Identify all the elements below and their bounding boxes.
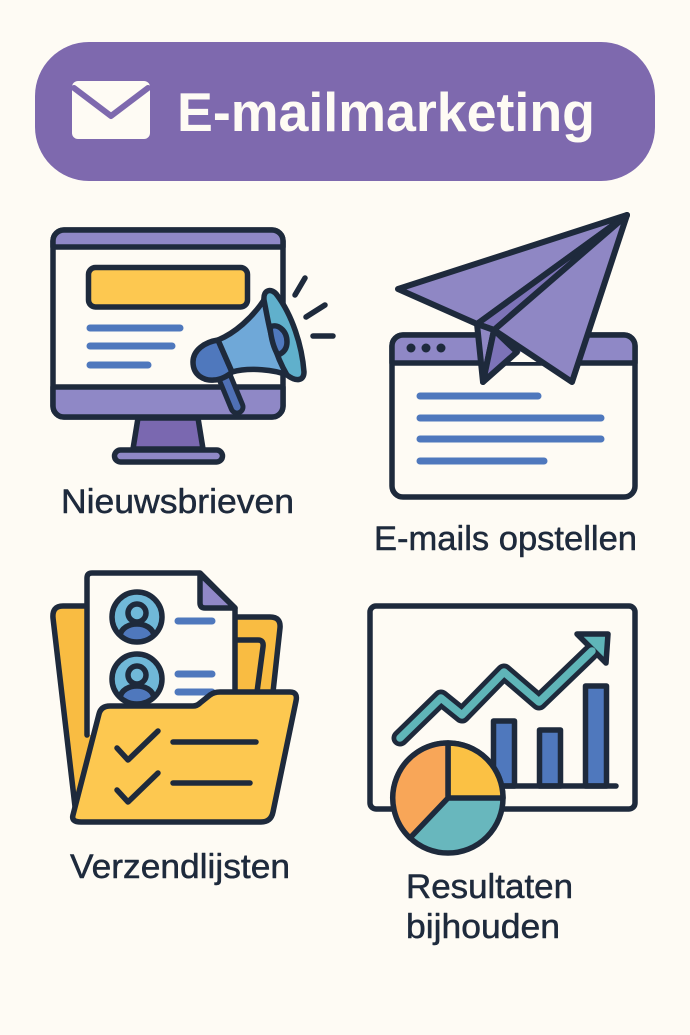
title banner	[35, 42, 655, 181]
icon: monitor	[53, 230, 283, 462]
label: Verzendlijsten: Verzendlijsten	[70, 848, 290, 886]
icon: chart frame	[370, 606, 635, 809]
panel: mailing lists	[53, 573, 296, 822]
icon: bar chart	[470, 686, 616, 786]
icon: trend arrow	[400, 634, 608, 738]
label: Resultaten bijhouden: bijhouden	[406, 908, 560, 946]
panel: composing e-mails	[392, 215, 635, 497]
label: Nieuwsbrieven: Nieuwsbrieven	[61, 483, 294, 521]
panel: newsletters	[53, 230, 333, 462]
icon: paper plane	[398, 215, 627, 382]
icon: pie chart	[393, 743, 503, 853]
title: E-mailmarketing	[177, 81, 595, 143]
label: E-mails opstellen: E-mails opstellen	[374, 520, 637, 558]
icon: envelope	[72, 81, 150, 139]
panel: tracking results	[370, 606, 635, 853]
label: Resultaten bijhouden: Resultaten	[406, 868, 573, 906]
icon: contact sheet	[87, 573, 235, 735]
icon: megaphone	[193, 278, 333, 407]
icon: folder front	[73, 692, 296, 822]
icon: folder back	[53, 606, 280, 815]
icon: browser window	[392, 335, 635, 497]
label: Resultaten bijhouden	[406, 868, 573, 946]
